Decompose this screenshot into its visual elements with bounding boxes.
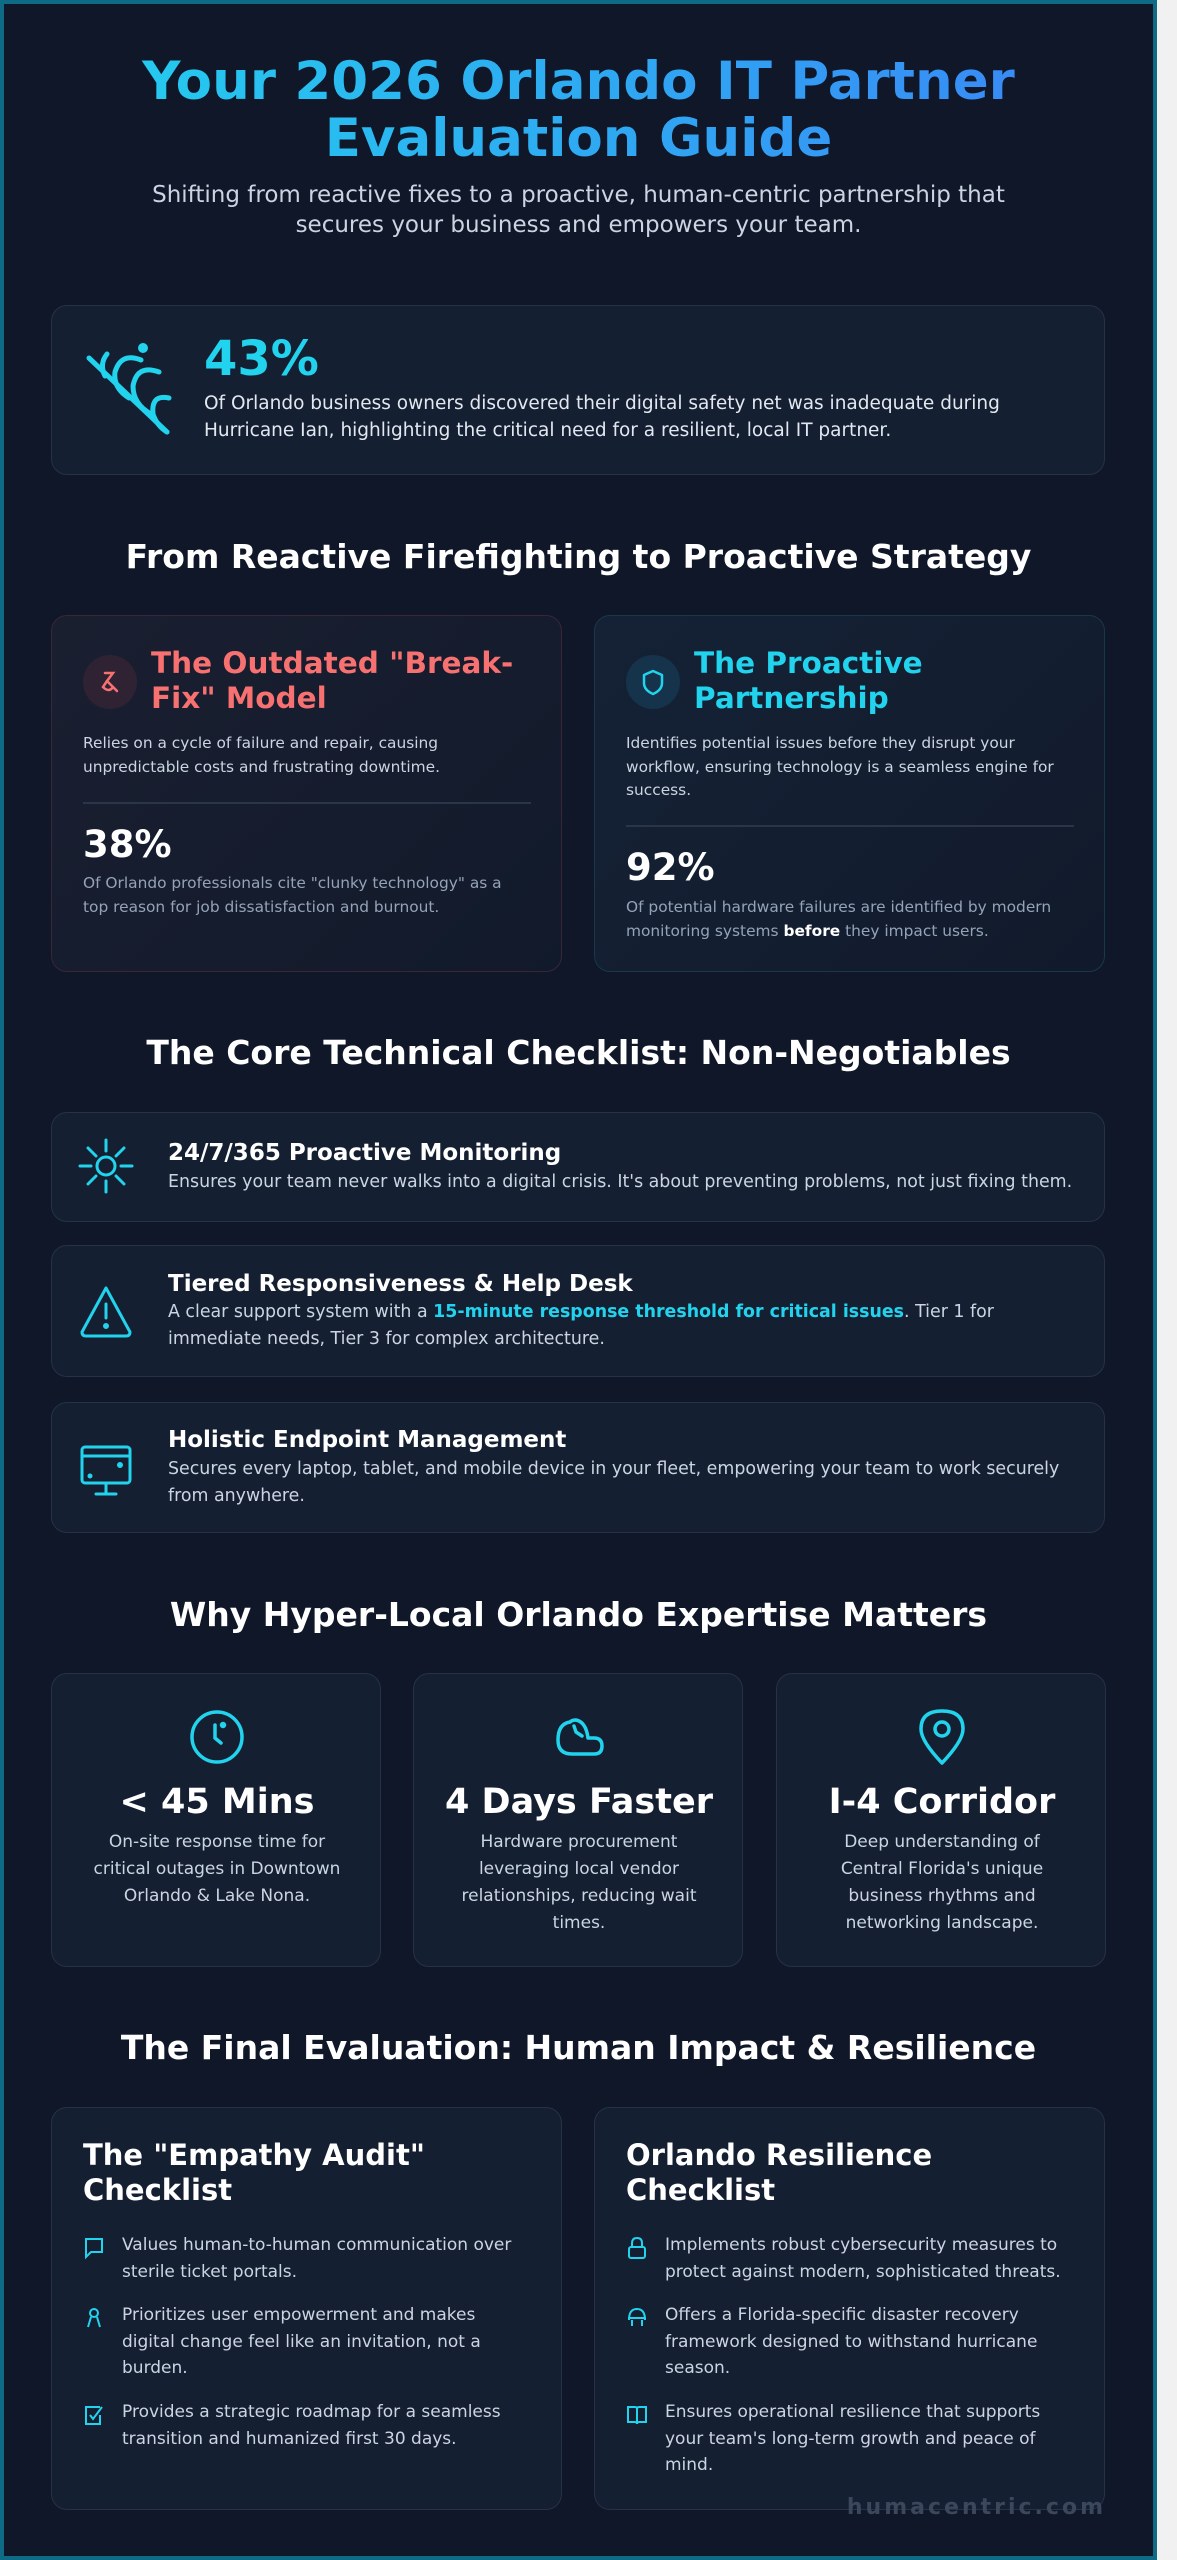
icon: map pin: [919, 1709, 965, 1765]
item: cybersecurity: Implements robust cybersecurity measures to protect against modern, sophisticated threats.: [665, 2235, 1061, 2282]
stat number: 43%: [204, 331, 319, 387]
item: disaster recovery: Offers a Florida-specific disaster recovery framework designed to withstand hurricane season.: [665, 2305, 1037, 2378]
stat: 92%: 92%: [626, 846, 715, 889]
icon: sun/monitoring: [78, 1138, 134, 1194]
icon: cloud: [556, 1718, 604, 1756]
panel: I-4 corridor: [776, 1673, 1106, 1967]
item title: Tiered Responsiveness & Help Desk: [168, 1271, 633, 1297]
description: Deep understanding of Central Florida's unique business rhythms and networking landscape.: [841, 1832, 1043, 1933]
heading: hyper-local: Why Hyper-Local Orlando Expertise Matters: [170, 1595, 987, 1634]
card description: Identifies potential issues before they disrupt your workflow, ensuring technology is a seamless engine for success.: [626, 734, 1054, 799]
stat description: Of potential hardware failures are identified by modern monitoring systems before they impact users.: [626, 898, 1051, 940]
heading: reactive vs proactive: From Reactive Firefighting to Proactive Strategy: [126, 537, 1031, 576]
card title: The Proactive Partnership: [694, 646, 923, 715]
description: On-site response time for critical outages in Downtown Orlando & Lake Nona.: [94, 1832, 340, 1906]
stat description: Of Orlando business owners discovered their digital safety net was inadequate during Hurricane Ian, highlighting the critical need for a resilient, local IT partner.: [204, 393, 1000, 441]
stat: I-4 Corridor: [829, 1782, 1055, 1822]
subtitle: Shifting from reactive fixes to a proactive, human-centric partnership that: [152, 182, 1005, 208]
icon: hurricane: [86, 343, 172, 434]
panel: break-fix model: [51, 615, 562, 972]
icon: shield: [626, 655, 680, 709]
stat: 38%: 38%: [83, 823, 172, 866]
item description: A clear support system with a 15-minute response threshold for critical issues. Tier 1 for immediate needs, Tier 3 for complex architecture.: [168, 1302, 994, 1349]
item: communication: Values human-to-human communication over sterile ticket portals.: [122, 2235, 511, 2282]
item title: 24/7/365 Proactive Monitoring: [168, 1140, 561, 1166]
title: [0, 53, 1157, 167]
icon: monitor: [80, 1446, 132, 1496]
panel: empathy audit: [51, 2107, 562, 2510]
card title: The Outdated "Break-Fix" Model: [151, 646, 513, 715]
card title: Checklist: [626, 2173, 775, 2207]
stat description: Of Orlando professionals cite "clunky technology" as a top reason for job dissatisfaction and burnout.: [83, 874, 502, 916]
card title: [626, 2138, 932, 2207]
card title: [83, 2138, 425, 2207]
panel: procurement: [413, 1673, 743, 1967]
title: Evaluation Guide: [325, 108, 832, 169]
icon: broken tool: [83, 655, 137, 709]
icon: clock: [190, 1710, 244, 1764]
watermark: humacentric.com: [847, 2495, 1106, 2520]
panel: help desk: [51, 1245, 1105, 1377]
item: roadmap: Provides a strategic roadmap for a seamless transition and humanized first 30 days.: [122, 2402, 501, 2448]
subtitle: [152, 182, 1005, 238]
panel: hurricane stat: [51, 305, 1105, 475]
icon: warning: [80, 1286, 132, 1338]
stat: 4 Days Faster: [445, 1782, 713, 1822]
card description: Relies on a cycle of failure and repair, causing unpredictable costs and frustrating downtime.: [83, 734, 440, 776]
stat: < 45 Mins: [120, 1782, 314, 1822]
description: Hardware procurement leveraging local vendor relationships, reducing wait times.: [462, 1832, 696, 1933]
item description: Ensures your team never walks into a digital crisis. It's about preventing problems, not just fixing them.: [168, 1172, 1072, 1192]
panel: proactive partnership: [594, 615, 1105, 972]
item description: Secures every laptop, tablet, and mobile device in your fleet, empowering your team to work securely from anywhere.: [168, 1459, 1059, 1506]
panel: resilience checklist: [594, 2107, 1105, 2510]
item: empowerment: Prioritizes user empowerment and makes digital change feel like an invitation, not a burden.: [122, 2305, 481, 2378]
card title: Orlando Resilience: [626, 2138, 932, 2172]
item title: Holistic Endpoint Management: [168, 1427, 566, 1453]
panel: endpoint management: [51, 1402, 1105, 1533]
heading: final evaluation: The Final Evaluation: Human Impact & Resilience: [121, 2028, 1036, 2067]
subtitle: secures your business and empowers your team.: [296, 212, 861, 238]
panel: monitoring: [51, 1112, 1105, 1222]
card title: The "Empathy Audit": [83, 2138, 425, 2172]
heading: core checklist: The Core Technical Checklist: Non-Negotiables: [146, 1033, 1011, 1072]
item: operational resilience: Ensures operational resilience that supports your team's long-term growth and peace of mind.: [665, 2402, 1040, 2475]
card title: Checklist: [83, 2173, 232, 2207]
panel: response time: [51, 1673, 381, 1967]
title: Your 2026 Orlando IT Partner: [142, 51, 1015, 112]
